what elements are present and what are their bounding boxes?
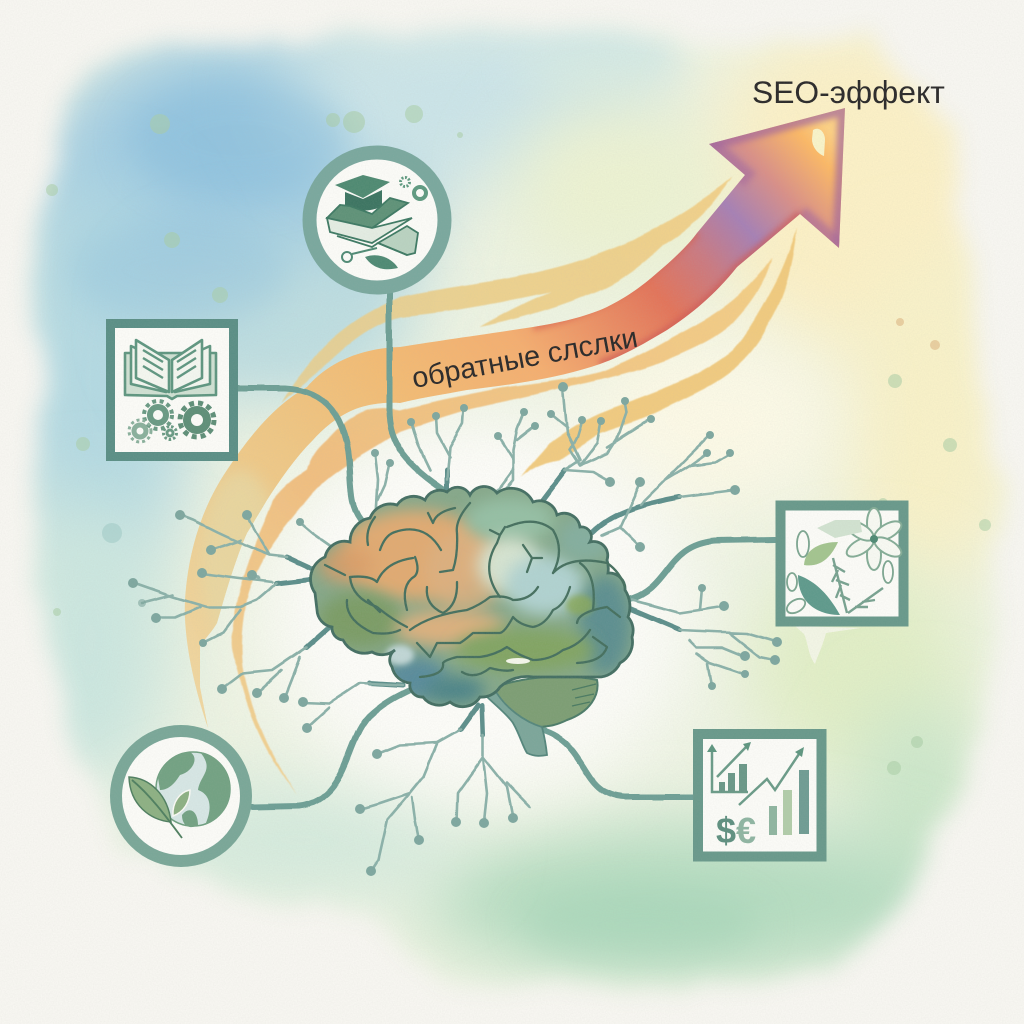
icon: graduation books circle bbox=[310, 152, 444, 288]
globe bbox=[156, 752, 230, 826]
cerebrum base with washes bbox=[312, 488, 632, 706]
leaf pair bbox=[129, 777, 171, 822]
outline leaves bbox=[784, 531, 893, 616]
pale leaves top bbox=[817, 520, 862, 538]
currency symbols: $€ bbox=[716, 810, 756, 851]
arrow edge tints bbox=[200, 108, 845, 650]
icon: earth and leaf circle bbox=[116, 731, 246, 861]
brainstem bbox=[483, 690, 547, 756]
cerebellum bbox=[483, 676, 598, 727]
brain bbox=[300, 480, 650, 756]
dark teal leaf bbox=[798, 575, 840, 615]
connector lines from icons to brain bbox=[238, 290, 775, 807]
open book bbox=[125, 340, 216, 399]
small leaf bbox=[173, 790, 190, 816]
arrowheads bbox=[707, 742, 804, 757]
icon: botanical square bbox=[780, 506, 904, 622]
graduation cap bbox=[335, 175, 390, 198]
thick branch roots bbox=[277, 470, 680, 735]
cerebellum folds bbox=[572, 684, 596, 706]
green leaf bbox=[804, 542, 838, 565]
branch end dots bbox=[128, 382, 782, 876]
label: backlinks: обратные слслки bbox=[409, 322, 640, 395]
brain glint bbox=[506, 658, 530, 664]
chart bars bbox=[719, 764, 809, 835]
gears bbox=[129, 401, 214, 442]
main arrow shaft and head bbox=[185, 108, 845, 728]
key, leaf and gears bbox=[342, 178, 426, 269]
white paint drip under botanical panel bbox=[795, 626, 860, 664]
stem bbox=[132, 780, 182, 838]
continents bbox=[158, 752, 230, 827]
neural branches with end dots bbox=[128, 382, 782, 876]
small chart axes and arrow bbox=[712, 747, 801, 805]
fern leaves bbox=[832, 558, 883, 613]
text lines in book bbox=[143, 350, 196, 378]
cap base bbox=[345, 190, 382, 211]
brain folds bbox=[325, 503, 625, 677]
decorative paint dots bbox=[46, 105, 991, 775]
cerebrum outline bbox=[311, 487, 633, 707]
book stack bbox=[327, 198, 418, 255]
icon: finance chart square bbox=[698, 734, 822, 856]
arrow head highlight bbox=[812, 129, 825, 156]
second orange band bbox=[231, 257, 772, 795]
upper streak bbox=[282, 177, 733, 403]
lower streak bbox=[520, 227, 797, 478]
fine branches bbox=[133, 393, 777, 871]
flower bbox=[844, 508, 904, 570]
growth arrow with backlink streams bbox=[185, 108, 845, 795]
icon: open book with gears bbox=[110, 324, 234, 456]
label: SEO effect: SEO-эффект bbox=[752, 74, 945, 110]
